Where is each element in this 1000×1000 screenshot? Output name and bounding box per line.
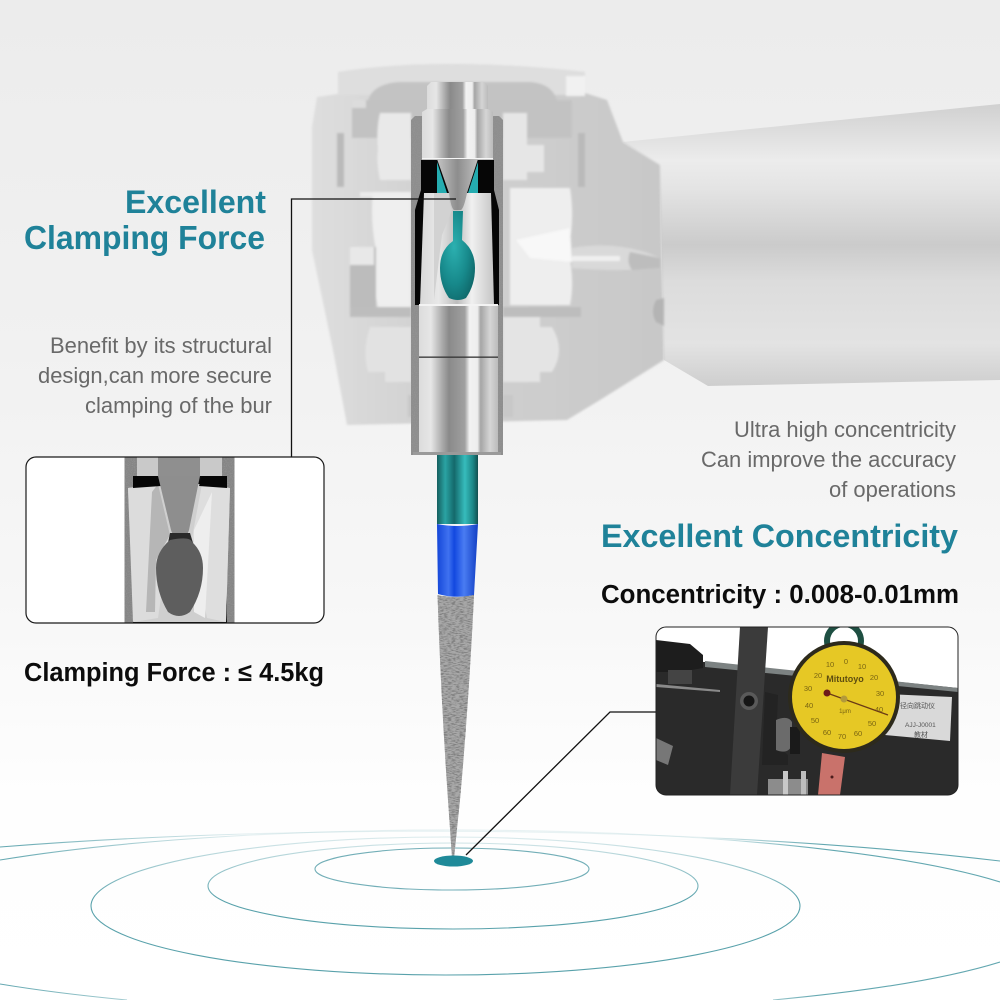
knob <box>656 640 703 672</box>
panel: dial gauge photo: 60 <box>854 729 862 738</box>
teal shank <box>437 455 478 524</box>
contact point <box>434 856 473 866</box>
dial face <box>788 641 900 753</box>
panel: dial gauge photo <box>656 624 958 795</box>
text: clamping description: design,can more secure <box>38 363 272 388</box>
text: clamping description: clamping of the bur <box>85 393 272 418</box>
panel: dial gauge photo: 教材 <box>914 730 928 739</box>
label: concentricity value: Concentricity : 0.008-0.01mm <box>601 581 959 609</box>
clamping cone <box>437 159 478 210</box>
heading: clamping force: Clamping Force <box>24 219 265 256</box>
spindle upper body <box>422 109 493 159</box>
heading: concentricity: Excellent Concentricity <box>601 518 958 554</box>
blue ring <box>437 524 478 597</box>
side bolt <box>656 738 673 765</box>
needle <box>827 693 888 715</box>
panel: dial gauge photo: 40 <box>875 705 883 714</box>
panel: dial gauge photo: 径向跳动仪 <box>900 701 935 710</box>
panel: dial gauge photo: Mitutoyo <box>826 674 864 684</box>
spindle top cap <box>427 82 488 110</box>
panel: dial gauge photo: 30 <box>804 684 812 693</box>
heading: clamping force <box>24 184 266 256</box>
panel: dial gauge photo: 50 <box>811 716 819 725</box>
panel: dial gauge photo: 40 <box>805 701 813 710</box>
collet <box>420 193 494 305</box>
callout line: concentricity <box>466 712 656 855</box>
spindle assembly <box>411 82 503 455</box>
red stem <box>818 753 845 795</box>
label: clamping force value: Clamping Force : ≤ 4.5kg <box>24 659 324 687</box>
handpiece head cross-section <box>312 64 664 425</box>
panel: dial gauge photo: 30 <box>876 689 884 698</box>
panel: dial gauge photo: 50 <box>868 719 876 728</box>
panel: dial gauge photo: 20 <box>870 673 878 682</box>
bracket <box>762 692 788 765</box>
text: concentricity description: Ultra high concentricity <box>734 417 956 442</box>
panel: dial gauge photo: 60 <box>823 728 831 737</box>
handpiece neck <box>623 104 1000 386</box>
concentric target rings <box>0 830 1000 1000</box>
teal wedges <box>437 162 447 193</box>
panel: dial gauge photo: 1μm <box>839 709 851 715</box>
text: clamping description: Benefit by its structural <box>50 333 272 358</box>
text: concentricity description: Can improve the accuracy <box>701 447 956 472</box>
heading: clamping force: Excellent <box>125 184 266 220</box>
panel: dial gauge photo: 10 <box>826 660 834 669</box>
text: concentricity description <box>701 417 956 502</box>
callout line: clamping <box>292 199 456 457</box>
diamond grit cone <box>438 595 474 858</box>
panel: dial gauge photo: AJJ-J0001 <box>905 722 936 729</box>
wheel <box>768 779 808 795</box>
green loop <box>824 628 864 645</box>
vertical bar <box>730 627 768 795</box>
panel: dial gauge photo: 10 <box>858 662 866 671</box>
lower body <box>419 305 498 454</box>
gauge plate <box>656 660 958 795</box>
panel: dial gauge photo: 0 <box>844 657 848 666</box>
panel: clamping detail <box>26 457 324 623</box>
text: concentricity description: of operations <box>829 477 956 502</box>
data label <box>885 694 952 741</box>
teal clamped bur <box>440 211 475 300</box>
outer sleeve <box>411 116 503 455</box>
panel: dial gauge photo: 70 <box>838 732 846 741</box>
bur shank and tip <box>434 455 478 866</box>
text: clamping description <box>38 333 272 418</box>
panel: dial gauge photo: 20 <box>814 671 822 680</box>
black cavity <box>415 160 499 305</box>
